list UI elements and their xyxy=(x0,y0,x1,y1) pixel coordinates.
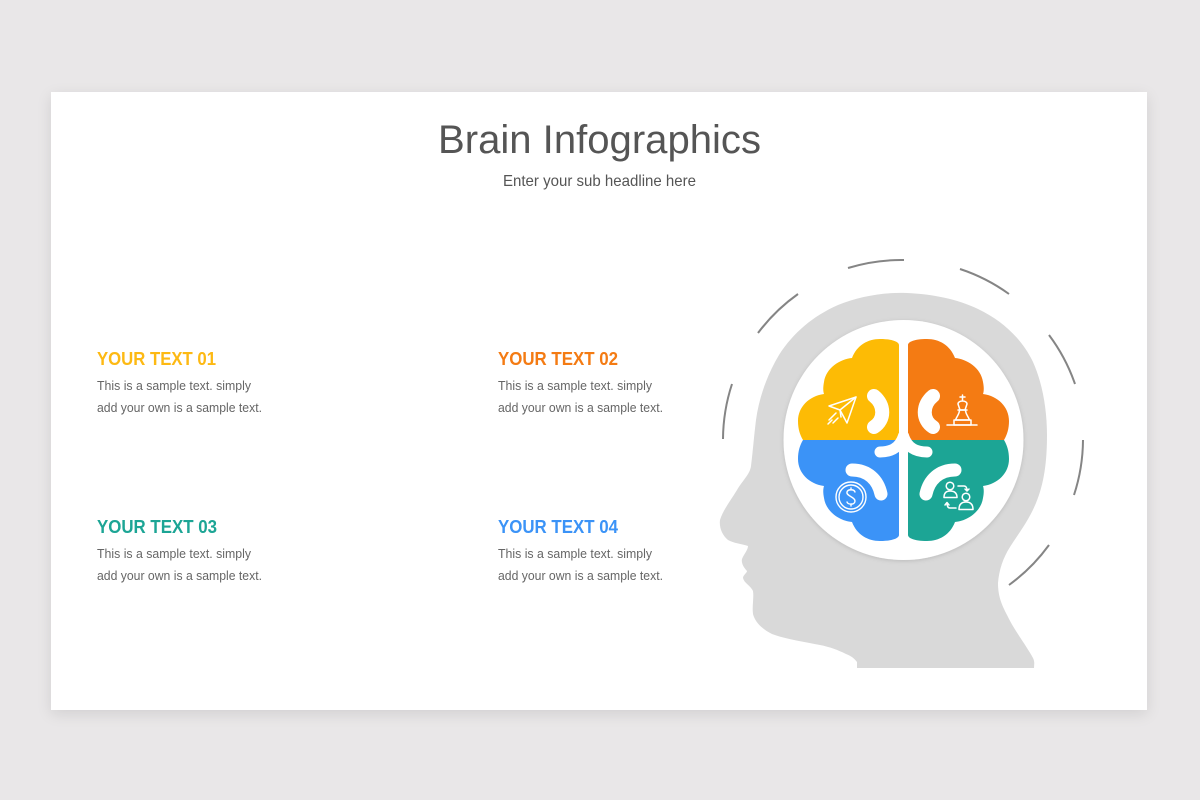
text block 01 xyxy=(97,349,262,415)
text block 02 xyxy=(498,349,663,415)
lobe: teal xyxy=(908,440,1009,541)
text block 04: add your own is a sample text. xyxy=(498,569,663,583)
text block 03 xyxy=(97,517,262,583)
brain folds xyxy=(852,396,955,494)
text block 04: This is a sample text. simply xyxy=(498,547,653,561)
text block 04 xyxy=(498,517,663,583)
lobe: orange xyxy=(908,339,1009,440)
head silhouette xyxy=(720,293,1047,668)
text block 04: YOUR TEXT 04 xyxy=(498,517,618,537)
icon: people exchange xyxy=(944,482,973,510)
icon: dollar coin xyxy=(836,482,866,512)
brain xyxy=(798,339,1009,541)
text block 03: YOUR TEXT 03 xyxy=(97,517,217,537)
dashed arcs around head xyxy=(723,260,1083,585)
title: Brain Infographics xyxy=(438,118,761,162)
text block 03: add your own is a sample text. xyxy=(97,569,262,583)
lobe: blue xyxy=(798,440,899,541)
text block 01: YOUR TEXT 01 xyxy=(97,349,216,369)
text block 01: This is a sample text. simply xyxy=(97,379,252,393)
subtitle: Enter your sub headline here xyxy=(503,173,696,190)
lobe: yellow xyxy=(798,339,899,440)
text block 02: add your own is a sample text. xyxy=(498,401,663,415)
panel: white slide card xyxy=(51,92,1147,710)
icon: paper plane xyxy=(828,397,856,424)
text block 03: This is a sample text. simply xyxy=(97,547,252,561)
text block 01: add your own is a sample text. xyxy=(97,401,262,415)
white circle xyxy=(784,320,1024,560)
text block 02: YOUR TEXT 02 xyxy=(498,349,618,369)
icon: chess piece xyxy=(947,395,977,425)
text block 02: This is a sample text. simply xyxy=(498,379,653,393)
